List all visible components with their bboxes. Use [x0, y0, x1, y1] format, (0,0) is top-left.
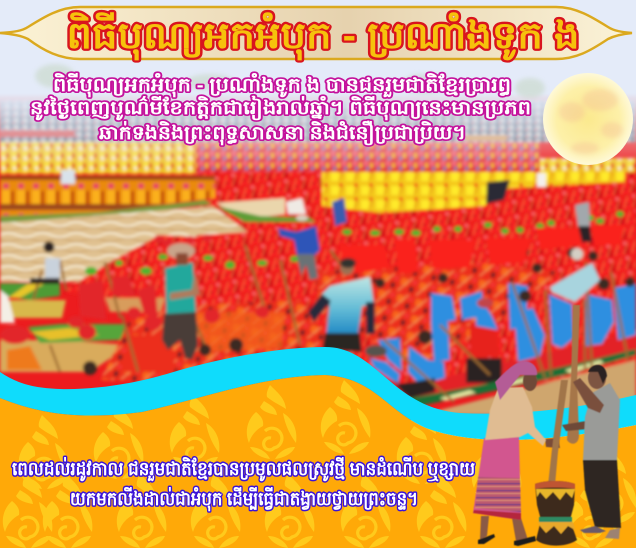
intro line 3: ឆាក់ទងនិងព្រះពុទ្ធសាសនា និងជំនឿប្រជាប្រិយ។	[99, 120, 466, 146]
far crowd centre red	[195, 142, 540, 174]
bottom paragraph	[12, 457, 475, 512]
boat red deck	[398, 330, 636, 402]
man with grey hat at wave	[365, 345, 387, 357]
lower-right water	[432, 360, 636, 415]
lower-centre red rowers	[120, 335, 175, 372]
left pale water strip	[0, 300, 66, 318]
yellow paddlers	[322, 172, 625, 213]
red caps and shirts	[0, 234, 269, 344]
pale trees in the distance	[35, 64, 545, 98]
forearm	[545, 438, 560, 448]
white figure top	[537, 173, 546, 187]
intro paragraph	[30, 73, 531, 146]
sandals	[478, 534, 495, 544]
bottom line 1: ពេលដល់រដូវកាល ជនរួមជាតិខ្មែរបានប្រមូលផលស្រូវថ្មី មានដំណើប ឬខ្សាយ	[12, 457, 475, 482]
woman pounding rice	[473, 361, 560, 546]
white seated figure	[286, 198, 306, 214]
upper-left boat hull	[0, 200, 212, 223]
trousers	[583, 460, 621, 528]
skirt	[473, 437, 521, 520]
centre mixed crowd	[316, 262, 560, 372]
intro line 2: នូវថ្ងៃពេញបូណ៌មីខែកត្តិកជារៀងរាល់ឆ្នាំ។ ពិធីបុណ្យនេះមានប្រភព	[30, 95, 531, 121]
green hats	[85, 211, 624, 275]
blouse	[485, 387, 546, 446]
far crowd right yellow	[540, 158, 636, 174]
title text: ពិធីបុណ្យអកអំបុក - ប្រណាំងទូក ង	[66, 12, 580, 61]
left rower in white	[30, 242, 60, 284]
man pounding rice	[562, 365, 621, 539]
distant spectators	[0, 100, 636, 142]
white object at left	[0, 290, 15, 323]
title banner	[0, 7, 632, 61]
red paddlers crowd	[200, 172, 636, 382]
raised arm	[573, 378, 604, 413]
intro line 1: ពិធីបុណ្យអកអំបុក - ប្រណាំងទូក ង បានជនរួមជាតិខ្មែរប្រារព្ធ	[53, 73, 511, 98]
man in jersey	[308, 258, 375, 352]
wooden mortar	[535, 481, 577, 546]
moon	[543, 73, 633, 165]
far crowd left yellow	[0, 142, 200, 174]
lower-centre orange rowers	[100, 300, 330, 385]
headscarf	[495, 361, 537, 400]
distant banners	[0, 130, 75, 137]
cyan wave	[0, 347, 636, 440]
lower-right boat hull	[410, 349, 636, 407]
paddlers tan hull	[105, 298, 165, 312]
green boat	[216, 206, 316, 222]
rowers paddles	[33, 245, 628, 402]
dark heads	[83, 248, 635, 375]
orange boat crew	[0, 176, 215, 218]
bright red shirts row	[340, 225, 625, 275]
flame pattern	[3, 380, 636, 548]
bottom red rower	[466, 298, 502, 383]
second striped hull	[28, 324, 125, 343]
pestles	[548, 305, 580, 485]
orange lower-left rower	[7, 346, 42, 370]
arm	[562, 421, 588, 431]
background: festival photo	[0, 100, 636, 415]
feet	[580, 526, 606, 533]
shirt	[583, 383, 620, 460]
lower-left red boat paddlers	[62, 235, 320, 345]
lower-left water	[0, 340, 130, 372]
top sky fade	[0, 0, 636, 170]
bottom line 2: យកមកលីងដាល់ជាអំបុក ដើម្បីធ្វើជាតង្វាយថ្វាយព្រះចន្ទ។	[70, 487, 418, 512]
man in turquoise shirt	[162, 243, 200, 360]
blue paddlers	[370, 283, 636, 385]
pale standing figure	[332, 198, 347, 226]
head	[523, 371, 537, 391]
standing grey figure	[575, 202, 590, 226]
head	[588, 367, 606, 389]
left striped hull	[0, 283, 60, 300]
dark figure top	[486, 180, 510, 204]
man in pale blue shirt right	[550, 248, 600, 302]
far water patch	[216, 198, 285, 218]
river water	[0, 206, 248, 282]
orange lower panel	[0, 375, 636, 548]
man in blue shirt	[278, 215, 320, 280]
dark trousers	[396, 378, 435, 398]
background base	[0, 0, 636, 420]
legs	[480, 516, 489, 540]
standing dark figure	[578, 226, 592, 242]
white figure left	[61, 170, 75, 184]
